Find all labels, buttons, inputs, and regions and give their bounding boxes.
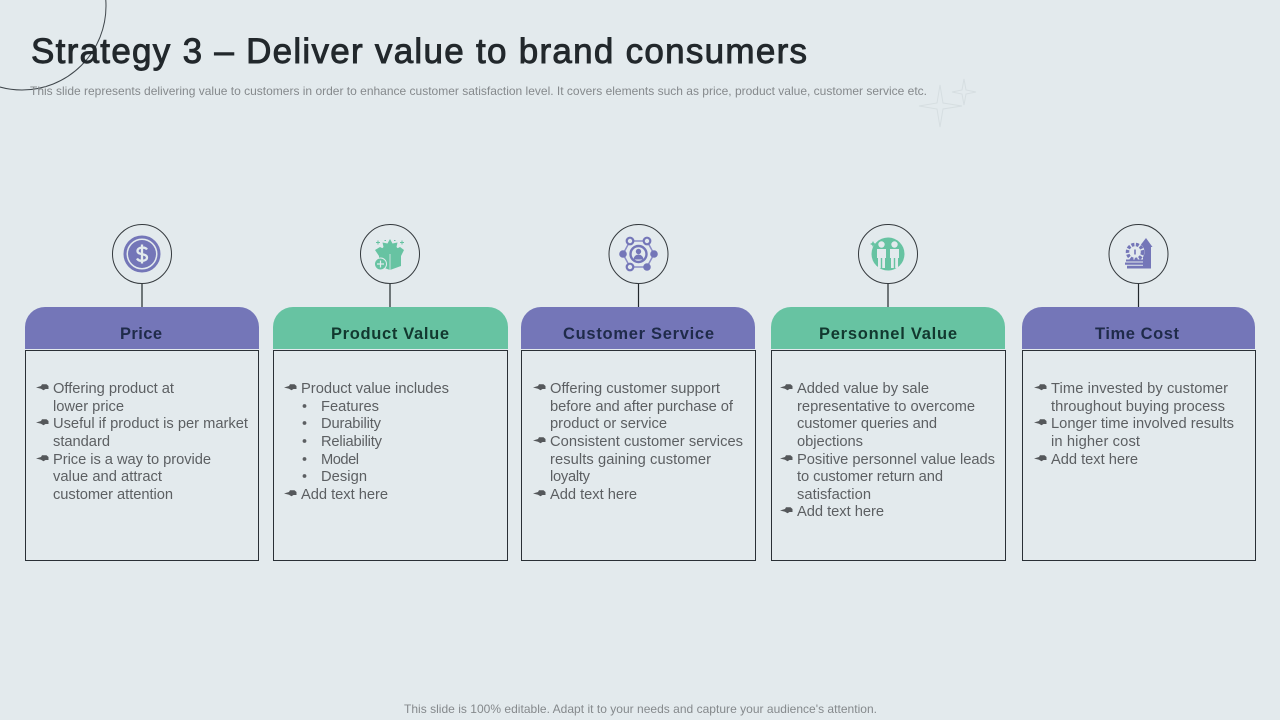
icon: two people	[858, 224, 918, 284]
panel body: Price: lower price	[53, 399, 124, 415]
panel body: Price: value and attract	[53, 469, 162, 485]
panel body: Personnel Value: satisfaction	[797, 487, 871, 503]
panel body: Time Cost: throughout buying process	[1051, 399, 1225, 415]
panel body: Personnel Value: representative to overcome	[797, 399, 975, 415]
panel body: Customer Service: Consistent customer services	[550, 434, 743, 450]
panel: product value	[273, 224, 508, 560]
panel body: Customer Service: loyalty	[550, 469, 591, 485]
panel body: Customer Service: Add text here	[550, 487, 637, 503]
panel header: Time Cost	[1022, 307, 1255, 349]
panel header: Product Value: Product Value	[331, 325, 449, 343]
panel header: Customer Service: Customer Service	[563, 325, 714, 343]
icon: gear, coins and up arrow	[1109, 224, 1168, 284]
panel body: Price: standard	[53, 434, 110, 450]
panel header: Price	[25, 307, 259, 349]
panel body: Price: customer attention	[53, 487, 173, 503]
panel header: Time Cost: Time Cost	[1095, 325, 1180, 343]
icon: open box with star	[360, 224, 420, 284]
panel body: Product Value: Reliability	[321, 434, 383, 450]
panel header: Personnel Value	[771, 307, 1005, 349]
footer note: This slide is 100% editable. Adapt it to your needs and capture your audience's attention.	[404, 702, 877, 716]
panel body: Customer Service	[522, 350, 756, 560]
panel body: Customer Service: product or service	[550, 416, 667, 432]
panel body: Customer Service: Offering customer support	[550, 381, 720, 397]
decorative circle arc	[0, 0, 106, 90]
panel header: Customer Service	[521, 307, 755, 349]
panel body: Personnel Value: Add text here	[797, 504, 884, 520]
panel: personnel value	[771, 224, 1006, 560]
panel body: Product Value: Model	[321, 452, 359, 468]
panel body: Customer Service: before and after purchase of	[550, 399, 734, 415]
panel body: Personnel Value: Positive personnel value leads	[797, 452, 995, 468]
panel body: Product Value: Durability	[321, 416, 382, 432]
subtitle: This slide represents delivering value to customers in order to enhance customer satisfaction level. It covers elements such as price, product value, customer service etc.	[30, 84, 927, 98]
panel header: Personnel Value: Personnel Value	[819, 325, 957, 343]
panel body: Time Cost: Longer time involved results	[1051, 416, 1234, 432]
panel: time cost	[1022, 224, 1256, 560]
decorative stars	[919, 79, 976, 127]
panel body: Personnel Value	[772, 350, 1006, 560]
panel header: Price: Price	[120, 325, 162, 343]
panel body: Time Cost	[1022, 350, 1256, 560]
panel body: Product Value: Features	[321, 399, 379, 415]
icon: customer network	[609, 224, 668, 284]
panel body: Price	[26, 350, 258, 560]
panel body: Personnel Value: Added value by sale	[797, 381, 929, 397]
panel body: Price: Price is a way to provide	[53, 452, 211, 468]
panel body: Time Cost: Add text here	[1051, 452, 1138, 468]
icon: dollar coin	[112, 224, 172, 284]
panel body: Personnel Value: objections	[797, 434, 863, 450]
panel body: Product Value	[274, 350, 508, 560]
panel body: Product Value: Product value includes	[301, 381, 449, 397]
panel body: Price: Offering product at	[53, 381, 174, 397]
panel: customer service	[521, 224, 756, 560]
panel body: Personnel Value: customer queries and	[797, 416, 937, 432]
panel body: Time Cost: Time invested by customer	[1051, 381, 1228, 397]
panel body: Price: Useful if product is per market	[53, 416, 248, 432]
panel header: Product Value	[273, 307, 508, 349]
panel: price	[25, 224, 259, 560]
panel body: Personnel Value: to customer return and	[797, 469, 943, 485]
panel body: Product Value: Design	[321, 469, 367, 485]
panel body: Customer Service: results gaining customer	[550, 452, 711, 468]
panel body: Product Value: Add text here	[301, 487, 388, 503]
title: Strategy 3 – Deliver value to brand consumers	[31, 32, 807, 71]
panel body: Time Cost: in higher cost	[1051, 434, 1140, 450]
